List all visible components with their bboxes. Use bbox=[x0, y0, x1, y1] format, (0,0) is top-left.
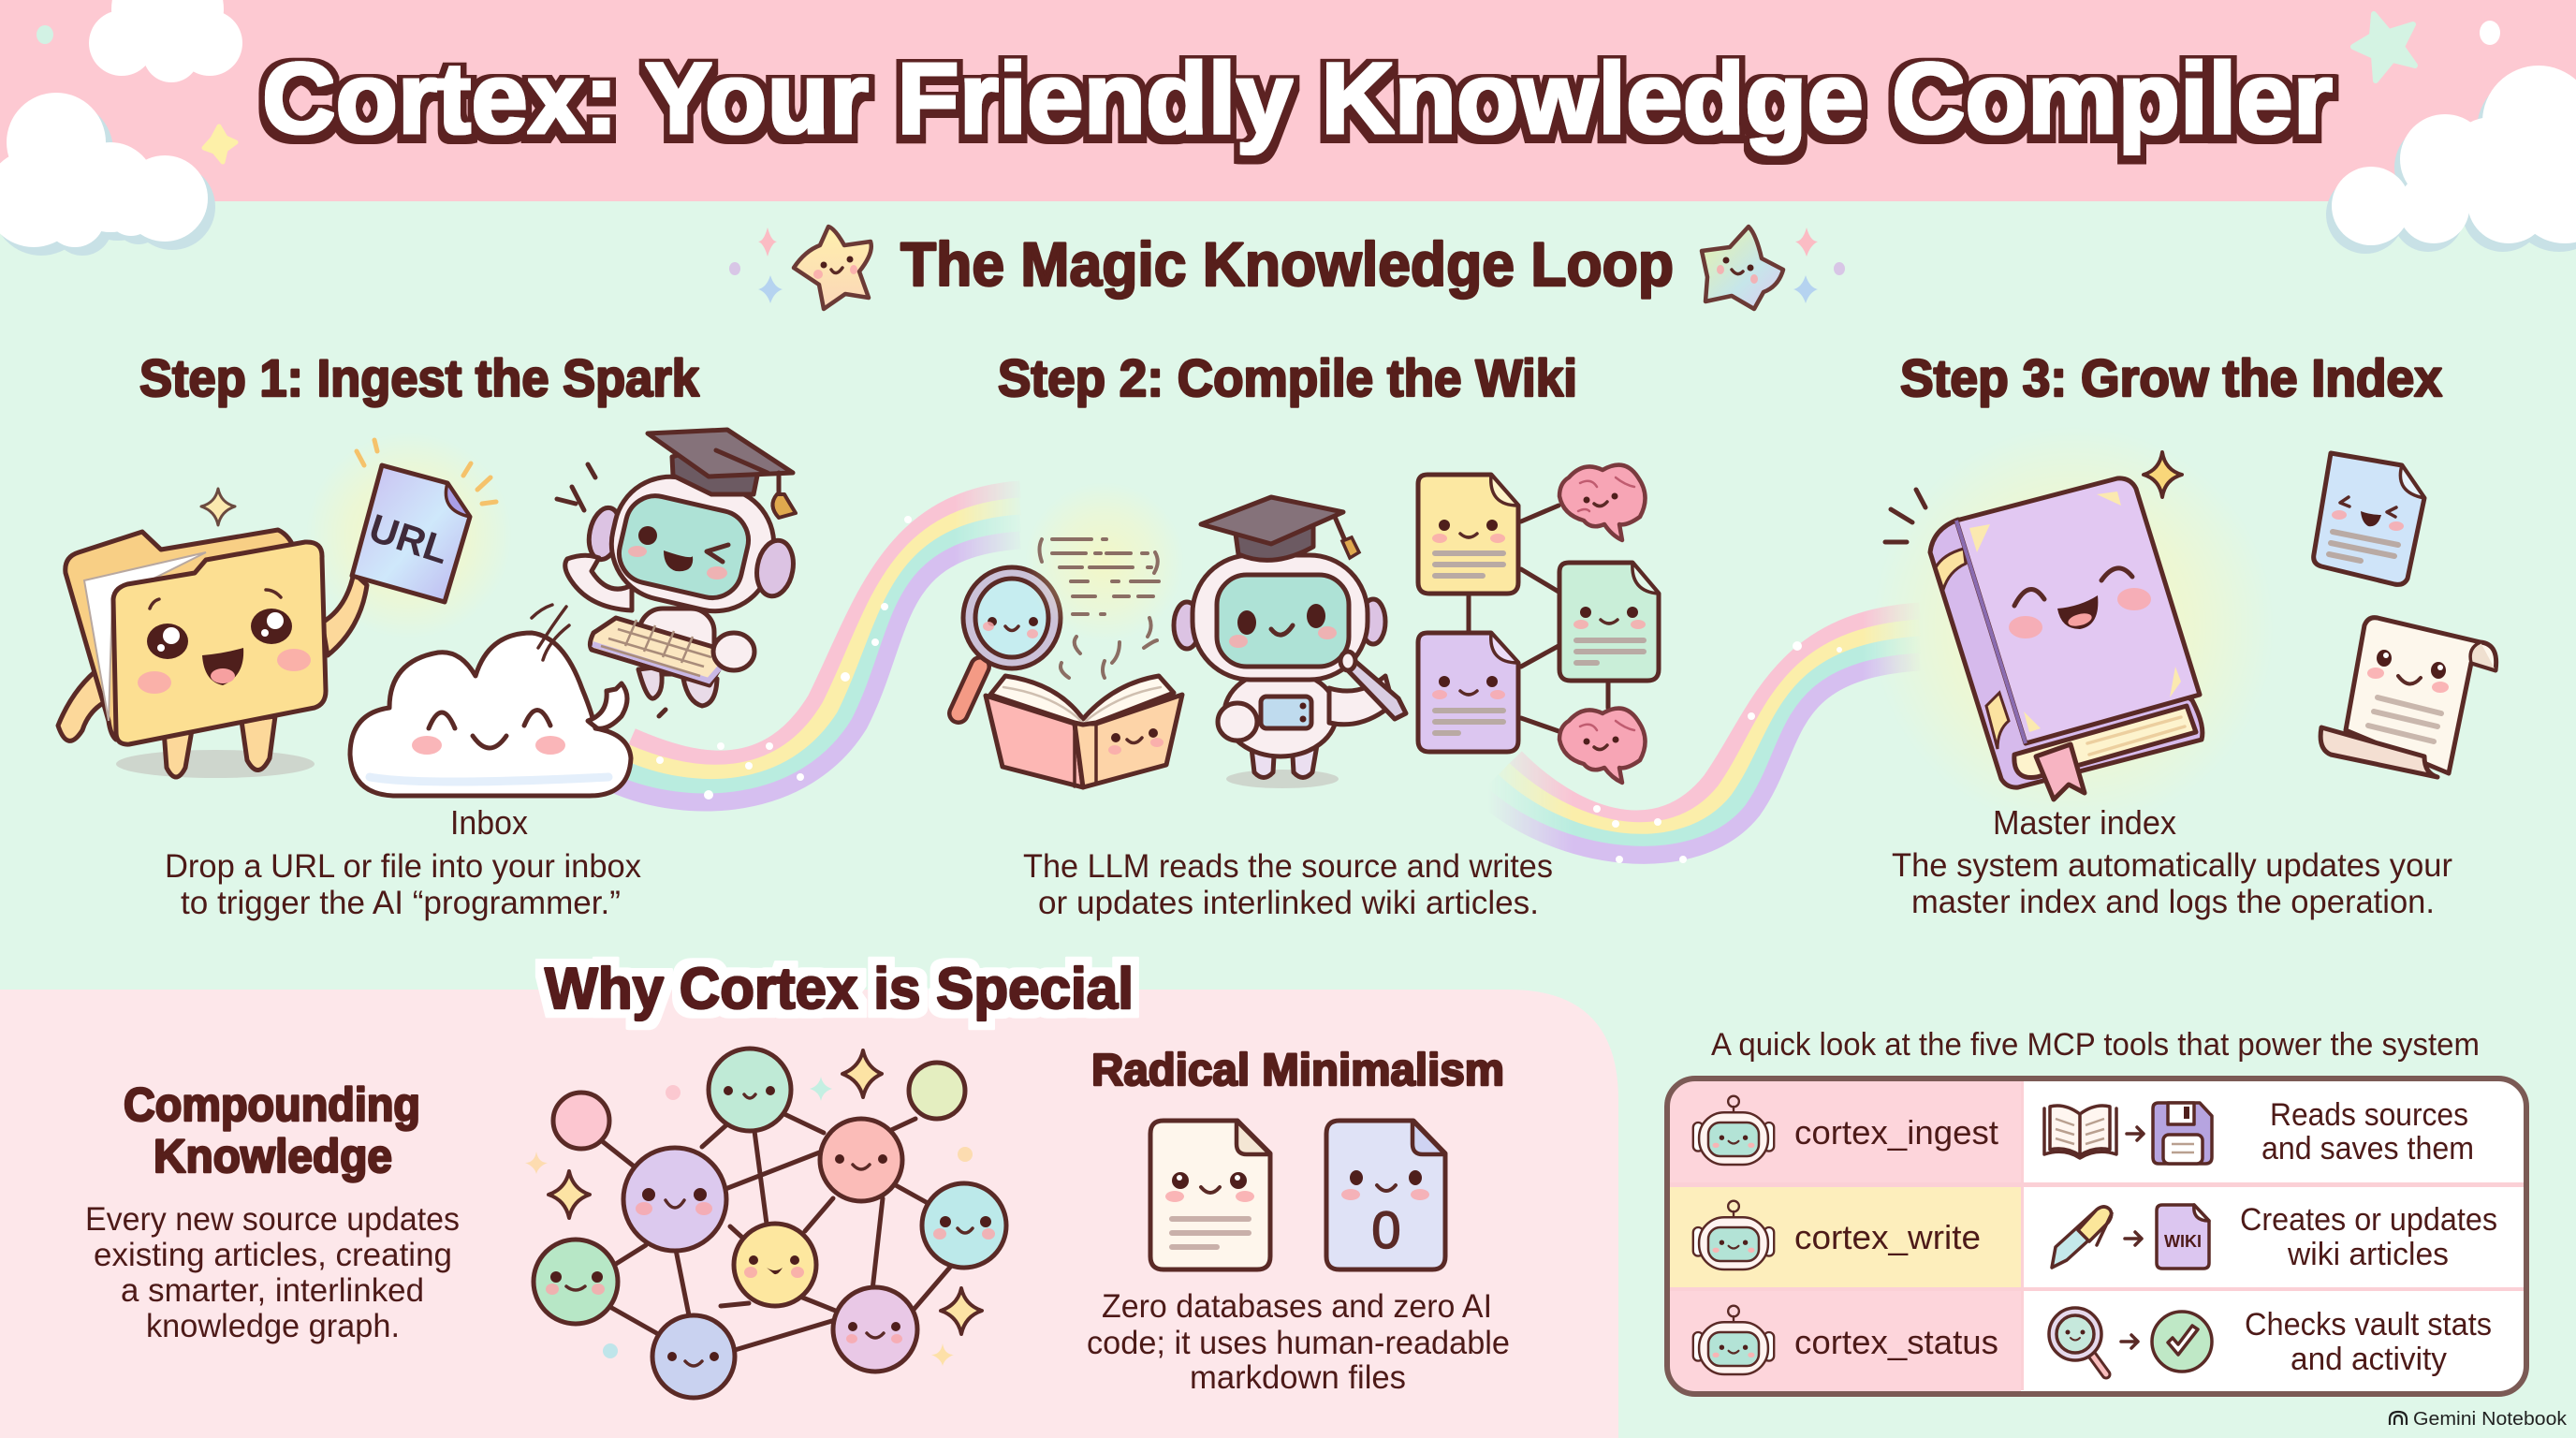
text: write description: Creates or updates bbox=[2240, 1202, 2497, 1238]
text: compounding knowledge description: a smarter, interlinked bbox=[121, 1272, 424, 1309]
icon: yellow star bbox=[204, 126, 236, 162]
cloud: lower left bbox=[0, 93, 215, 256]
row: cortex_write bbox=[1693, 1201, 2497, 1272]
icon: brain bottom bbox=[1559, 709, 1646, 783]
text: write description bbox=[2240, 1202, 2497, 1272]
heading: step 1: Step 1: Ingest the Spark bbox=[139, 348, 700, 407]
heading: step 3: Step 3: Grow the Index bbox=[1900, 348, 2442, 407]
row: cortex_ingest: cortex_ingest bbox=[1794, 1113, 1998, 1152]
icon: left star with sparkles bbox=[729, 227, 871, 309]
table: MCP tools bbox=[1667, 1078, 2526, 1394]
cloud: right bbox=[2326, 66, 2576, 254]
icon: dots bbox=[37, 21, 2500, 45]
heading: step 2: Step 2: Compile the Wiki bbox=[998, 348, 1577, 407]
text: ingest description: Reads sources bbox=[2270, 1097, 2468, 1133]
rainbow: step 2 to step 3 bbox=[1480, 611, 1920, 863]
icon: magnifier to check bbox=[2049, 1308, 2212, 1374]
text: step 3 description: The system automatically updates your bbox=[1892, 847, 2452, 884]
cloud: top left small bbox=[89, 0, 242, 82]
text: radical minimalism description: code; it uses human-readable bbox=[1087, 1325, 1510, 1361]
text: wiki tag: WIKI bbox=[2164, 1232, 2202, 1251]
illustration: step 1 happy cloud bbox=[350, 605, 631, 796]
text: status description: Checks vault stats bbox=[2245, 1307, 2492, 1343]
icon: markdown document bbox=[1150, 1121, 1270, 1269]
text: step 2 description: The LLM reads the source and writes bbox=[1023, 848, 1553, 885]
subheading: radical minimalism: Radical Minimalism bbox=[1091, 1046, 1504, 1095]
label: master index: Master index bbox=[1993, 803, 2176, 842]
icon: sparkles around graph bbox=[525, 1050, 982, 1366]
text: zero glyph: 0 bbox=[1371, 1200, 1401, 1259]
text: compounding knowledge description bbox=[85, 1201, 460, 1344]
row: cortex_ingest bbox=[1693, 1096, 2474, 1167]
illustration: step 2 magnifier bbox=[959, 567, 1061, 713]
heading: why cortex is special: Why Cortex is Special bbox=[545, 957, 1134, 1021]
illustration: step 2 code lines bbox=[1025, 482, 1184, 678]
text: compounding knowledge description: Every new source updates bbox=[85, 1201, 460, 1238]
text: ingest description bbox=[2261, 1097, 2474, 1167]
text: step 2 description: or updates interlinked wiki articles. bbox=[1038, 885, 1539, 921]
illustration: step 3 blue document bbox=[2314, 453, 2424, 584]
illustration: step 3 scroll bbox=[2320, 618, 2496, 777]
text: URL label: URL bbox=[364, 506, 454, 572]
text: compounding knowledge description: existing articles, creating bbox=[94, 1237, 452, 1273]
text: compounding knowledge description: knowledge graph. bbox=[146, 1308, 400, 1344]
icon: mint star bbox=[2353, 14, 2415, 81]
text: step 3 description: master index and logs the operation. bbox=[1911, 884, 2435, 920]
icon: pen to wiki bbox=[2052, 1205, 2209, 1269]
text: radical minimalism description bbox=[1087, 1288, 1510, 1396]
text: status description: and activity bbox=[2291, 1342, 2447, 1377]
text: step 3 description bbox=[1892, 847, 2452, 920]
subheading: compounding knowledge bbox=[124, 1078, 420, 1182]
watermark: Gemini Notebook: Gemini Notebook bbox=[2413, 1409, 2568, 1430]
icon: zero document bbox=[1326, 1121, 1445, 1269]
header band bbox=[0, 0, 2576, 201]
text: radical minimalism description: markdown files bbox=[1190, 1359, 1406, 1396]
icon: book to floppy bbox=[2044, 1103, 2212, 1164]
subheading: compounding knowledge: Compounding bbox=[124, 1078, 420, 1131]
text: step 1 description: Drop a URL or file into your inbox bbox=[165, 848, 641, 885]
text: ingest description: and saves them bbox=[2261, 1131, 2474, 1167]
icon: brain top bbox=[1559, 465, 1646, 540]
section title: the magic knowledge loop: The Magic Knowledge Loop bbox=[900, 229, 1674, 299]
doc: yellow bbox=[1418, 475, 1518, 594]
illustration: step 2 robot bbox=[1174, 497, 1406, 788]
doc: green bbox=[1559, 563, 1659, 681]
text: step 1 description: to trigger the AI “programmer.” bbox=[181, 885, 621, 921]
caption: MCP tools table: A quick look at the five MCP tools that power the system bbox=[1711, 1027, 2480, 1063]
text: step 2 description bbox=[1023, 848, 1553, 921]
row: cortex_status: cortex_status bbox=[1794, 1323, 1998, 1361]
text: write description: wiki articles bbox=[2287, 1237, 2449, 1272]
label: inbox: Inbox bbox=[450, 803, 528, 842]
chart: knowledge graph network bbox=[525, 1049, 1006, 1398]
subheading: compounding knowledge: Knowledge bbox=[154, 1130, 392, 1182]
title: Cortex: Your Friendly Knowledge Compiler bbox=[262, 41, 2333, 154]
illustration: step 1 folder with URL bbox=[58, 433, 512, 778]
row: cortex_status bbox=[1693, 1306, 2492, 1377]
text: radical minimalism description: Zero databases and zero AI bbox=[1102, 1288, 1492, 1325]
doc: purple bbox=[1418, 633, 1518, 752]
icon: right star with sparkles bbox=[1702, 227, 1845, 309]
text: status description bbox=[2245, 1307, 2492, 1377]
text: step 1 description bbox=[165, 848, 641, 921]
illustration: step 2 connected wiki documents and brains bbox=[1418, 465, 1659, 783]
illustration: step 1 robot with keyboard bbox=[557, 430, 798, 716]
row: cortex_write: cortex_write bbox=[1794, 1218, 1981, 1256]
rainbow: step 1 to step 2 bbox=[613, 490, 1020, 802]
illustration: step 3 glowing book bbox=[1872, 426, 2275, 829]
illustration: step 2 open book bbox=[986, 676, 1182, 787]
panel: why cortex is special background bbox=[0, 990, 1618, 1438]
